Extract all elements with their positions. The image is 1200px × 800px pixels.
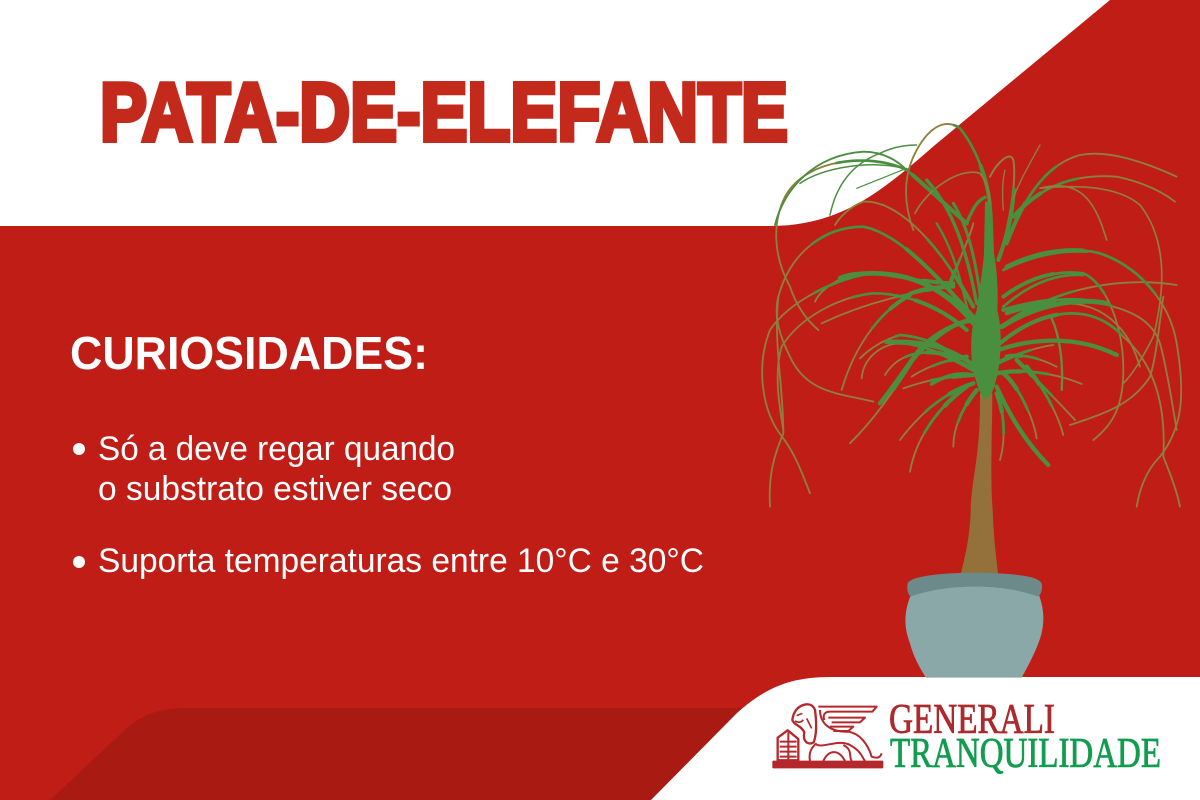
plant illustration bbox=[762, 124, 1181, 575]
plant leaves bbox=[762, 124, 1181, 507]
logo wordmark: Generali: GENERALI bbox=[889, 697, 1055, 743]
bullet item: watering: o substrato estiver seco bbox=[98, 470, 452, 508]
plant pot bbox=[905, 573, 1043, 678]
bullet item: watering bbox=[73, 430, 455, 508]
title: PATA-DE-ELEFANTE bbox=[100, 66, 788, 158]
plant trunk bbox=[961, 393, 998, 575]
background: white top panel bbox=[0, 0, 1110, 226]
background: dark red bottom band bbox=[50, 708, 743, 800]
pot rim bbox=[907, 573, 1042, 597]
bullet item: watering: Só a deve regar quando bbox=[98, 430, 455, 468]
logo icon: winged lion with book bbox=[773, 704, 882, 767]
logo: Generali Tranquilidade bbox=[773, 697, 1161, 777]
heading: curiosidades: CURIOSIDADES: bbox=[70, 327, 428, 379]
pot body bbox=[905, 586, 1043, 678]
background: white logo panel bbox=[651, 677, 1200, 800]
bullet item: temperature: Suporta temperaturas entre 10°C e 30°C bbox=[98, 542, 704, 580]
plant crown bbox=[971, 202, 1001, 399]
bullet list bbox=[73, 430, 704, 580]
